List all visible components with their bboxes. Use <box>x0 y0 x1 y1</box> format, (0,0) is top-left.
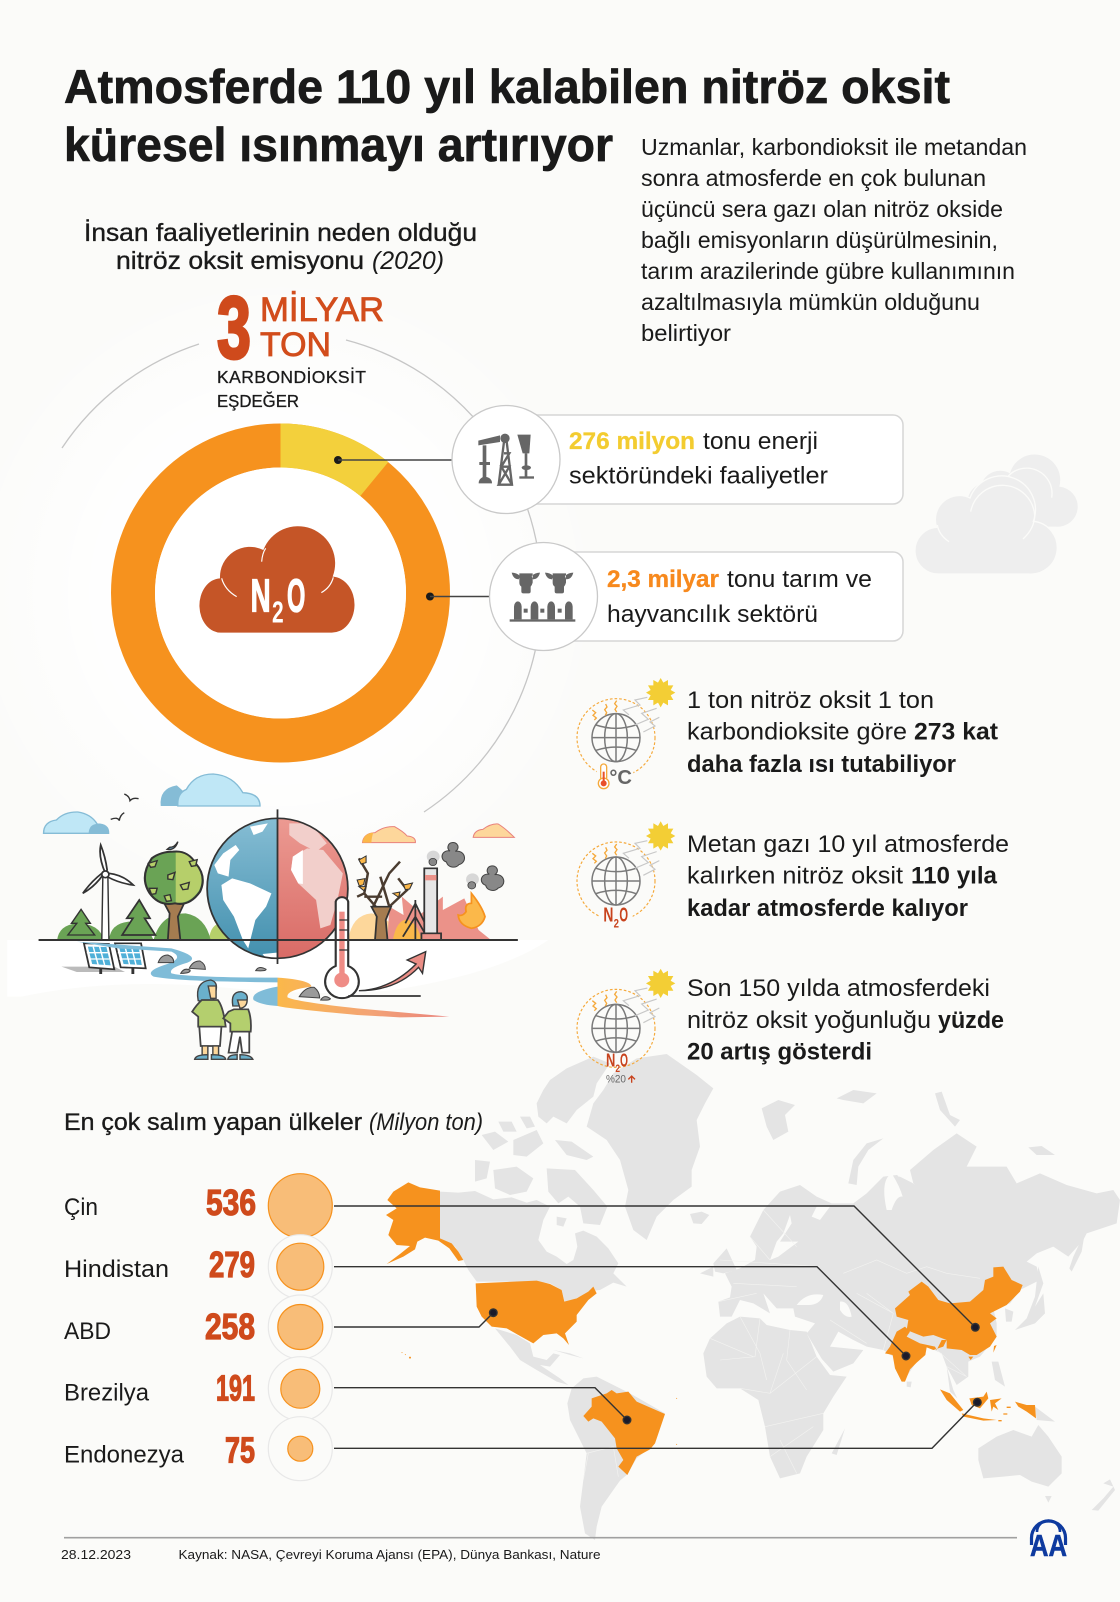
callout: energy: sektöründeki faaliyetler <box>569 462 828 490</box>
intro paragraph: üçüncü sera gazı olan nitröz okside <box>641 196 1003 222</box>
rising arrow <box>348 952 426 996</box>
logo: AA: AA <box>1030 1528 1067 1563</box>
N2O cloud icon <box>199 526 355 633</box>
total: 3 milyar ton: MİLYAR <box>260 291 384 329</box>
date: 28.12.2023 <box>61 1547 131 1562</box>
chart heading: (2020) <box>372 247 444 275</box>
total: 3 milyar ton: KARBONDİOKSİT <box>217 367 366 387</box>
total: 3 milyar ton: EŞDEĞER <box>217 390 299 411</box>
row: ABD <box>64 1295 332 1359</box>
callout: energy: tonu enerji <box>703 428 818 455</box>
section heading: top emitters: En çok salım yapan ülkeler <box>64 1109 362 1136</box>
fact 3 <box>577 969 1004 1085</box>
icon: globe with 20 percent rise: O <box>620 1050 628 1071</box>
row: Endonezya: 75 <box>225 1430 255 1471</box>
green hills and trees <box>57 842 232 940</box>
row: Hindistan: 279 <box>209 1244 255 1285</box>
intro paragraph: azaltılmasıyla mümkün olduğunu <box>641 289 980 315</box>
callout: agriculture: hayvancılık sektörü <box>607 601 818 628</box>
background clouds <box>915 454 1078 574</box>
globe <box>207 809 348 964</box>
river <box>77 942 449 1017</box>
glow behind donut <box>0 273 601 913</box>
fact 3: 20 artış gösterdi <box>687 1038 872 1066</box>
outer arc <box>62 340 542 812</box>
ground line <box>39 937 518 943</box>
section heading: top emitters <box>64 1109 483 1136</box>
callout: agriculture <box>490 542 903 650</box>
fact 3: Son 150 yılda atmosferdeki <box>687 975 990 1002</box>
row: Hindistan <box>64 1235 332 1299</box>
callout: agriculture: tonu tarım ve <box>727 566 872 593</box>
fact 1: 1 ton nitröz oksit 1 ton <box>687 687 934 714</box>
row: Çin <box>64 1174 332 1238</box>
donut chart <box>133 423 428 740</box>
fact 2: kalırken nitröz oksit <box>687 862 903 890</box>
icon: globe with thermometer <box>577 678 675 789</box>
chart heading: İnsan faaliyetlerinin neden olduğu <box>84 218 477 247</box>
icon: globe with 20 percent rise: 2 <box>615 1063 620 1075</box>
icon: globe with N2O: N <box>603 905 613 927</box>
row: ABD: 258 <box>205 1306 255 1347</box>
intro paragraph: Uzmanlar, karbondioksit ile metandan <box>641 134 1027 160</box>
total: 3 milyar ton <box>217 278 384 411</box>
clouds <box>44 774 514 843</box>
row: Çin: Çin <box>64 1194 98 1221</box>
icon: globe with 20 percent rise: %20 <box>606 1073 626 1085</box>
intro paragraph: tarım arazilerinde gübre kullanımının <box>641 258 1015 284</box>
fact 2: kadar atmosferde kalıyor <box>687 895 968 922</box>
leader lines <box>334 1206 981 1448</box>
icon: globe with thermometer: °C <box>609 766 632 789</box>
intro paragraph <box>641 134 1027 346</box>
intro paragraph: belirtiyor <box>641 320 731 346</box>
row: Endonezya <box>64 1417 332 1481</box>
solar panels <box>61 943 146 974</box>
fact 1: karbondioksite göre <box>687 718 907 746</box>
fact 1: daha fazla ısı tutabiliyor <box>687 751 956 778</box>
chart heading: nitröz oksit emisyonu <box>116 247 364 275</box>
icon: globe with N2O: 2 <box>614 916 619 930</box>
row: Brezilya: Brezilya <box>64 1380 150 1407</box>
row: Endonezya: Endonezya <box>64 1442 185 1469</box>
dead tree <box>348 843 504 940</box>
thermometer <box>325 897 359 998</box>
icon: oil pump <box>478 434 534 485</box>
fact 2 <box>577 821 1009 931</box>
N2O cloud icon: O <box>287 570 305 622</box>
family <box>192 980 253 1059</box>
icon: globe with N2O: O <box>619 905 628 927</box>
row: Brezilya <box>64 1357 332 1421</box>
section heading: top emitters: (Milyon ton) <box>369 1109 483 1136</box>
fact 3: nitröz oksit yoğunluğu <box>687 1007 931 1034</box>
row: ABD: ABD <box>64 1318 111 1345</box>
total: 3 milyar ton: 3 <box>217 278 251 377</box>
icon: globe with N2O <box>577 821 675 931</box>
fact 2: 110 yıla <box>911 862 998 890</box>
intro paragraph: bağlı emisyonların düşürülmesinin, <box>641 227 998 253</box>
world map <box>386 1054 1120 1540</box>
birds <box>111 794 139 821</box>
fact 1 <box>577 678 998 789</box>
connector: energy <box>334 456 454 464</box>
fact 1: 273 kat <box>914 718 998 746</box>
icon: globe with 20 percent rise <box>577 969 675 1085</box>
icon: cows and fence <box>510 573 575 622</box>
title: Atmosferde 110 yıl kalabilen nitröz oksit <box>64 60 950 113</box>
footer rule <box>64 1537 1017 1539</box>
callout: energy: 276 milyon <box>569 428 695 455</box>
total: 3 milyar ton: TON <box>260 326 331 364</box>
source: Kaynak: NASA, Çevreyi Koruma Ajansı (EPA), Dünya Bankası, Nature <box>178 1547 600 1562</box>
intro paragraph: sonra atmosferde en çok bulunan <box>641 165 986 191</box>
connector: agriculture <box>426 592 492 600</box>
chart heading <box>84 218 477 275</box>
fact 3: yüzde <box>938 1007 1004 1034</box>
title: küresel ısınmayı artırıyor <box>64 118 613 171</box>
callout: agriculture: 2,3 milyar <box>607 566 719 593</box>
fact 2: Metan gazı 10 yıl atmosferde <box>687 831 1009 858</box>
title <box>64 60 950 171</box>
icon: globe with 20 percent rise: N <box>606 1050 615 1071</box>
N2O cloud icon: 2 <box>272 596 284 630</box>
row: Hindistan: Hindistan <box>64 1256 169 1283</box>
N2O cloud icon: N <box>251 570 271 622</box>
rocks <box>158 955 330 1000</box>
row: Çin: 536 <box>206 1182 256 1223</box>
callout: energy <box>452 406 903 514</box>
row: Brezilya: 191 <box>216 1368 255 1409</box>
illustration: healthy vs. warming earth <box>38 773 518 1060</box>
